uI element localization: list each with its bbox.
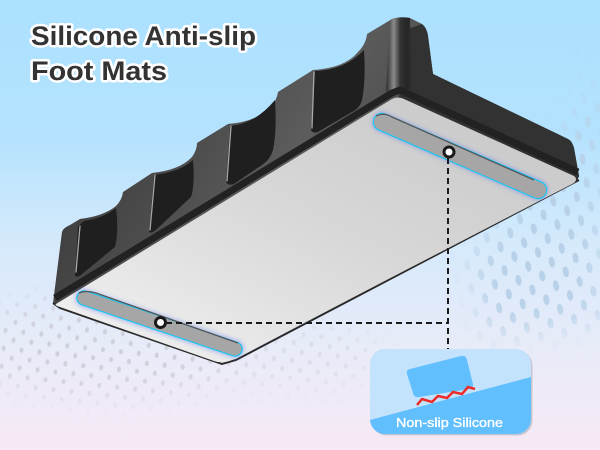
slot glossy highlights — [76, 72, 314, 272]
silicone block — [407, 356, 473, 397]
marker: upper mat — [444, 147, 454, 157]
dock corner column — [386, 17, 412, 97]
callout label: Non-slip Silicone — [396, 415, 503, 430]
dock black body — [53, 17, 579, 306]
card background — [370, 349, 531, 434]
sloped surface — [370, 377, 531, 434]
red grip line — [417, 387, 475, 405]
upper foot mat — [376, 114, 538, 190]
charging dock, underside view — [53, 17, 579, 364]
mat glow — [84, 298, 235, 349]
lower foot mat — [79, 292, 238, 349]
callout card: non-slip silicone — [370, 349, 532, 436]
title: Silicone Anti-slip — [31, 21, 256, 51]
dot pattern: right side — [464, 104, 600, 344]
dock right side face — [397, 24, 579, 181]
mat fill — [84, 298, 235, 349]
mat fill — [382, 122, 538, 190]
mat glow — [382, 122, 538, 190]
dock dark rim along plate — [55, 90, 578, 298]
marker: lower mat — [156, 318, 166, 328]
dashed leader lines — [166, 158, 448, 349]
title — [31, 21, 256, 86]
card shadow — [372, 350, 532, 436]
dot pattern: lower left — [0, 290, 367, 404]
underside plate — [56, 98, 576, 362]
title: Foot Mats — [31, 56, 167, 86]
mat outline — [382, 122, 538, 190]
dock dark edge along plate — [53, 180, 579, 364]
mat outline — [84, 298, 235, 349]
dock slots — [75, 50, 365, 277]
